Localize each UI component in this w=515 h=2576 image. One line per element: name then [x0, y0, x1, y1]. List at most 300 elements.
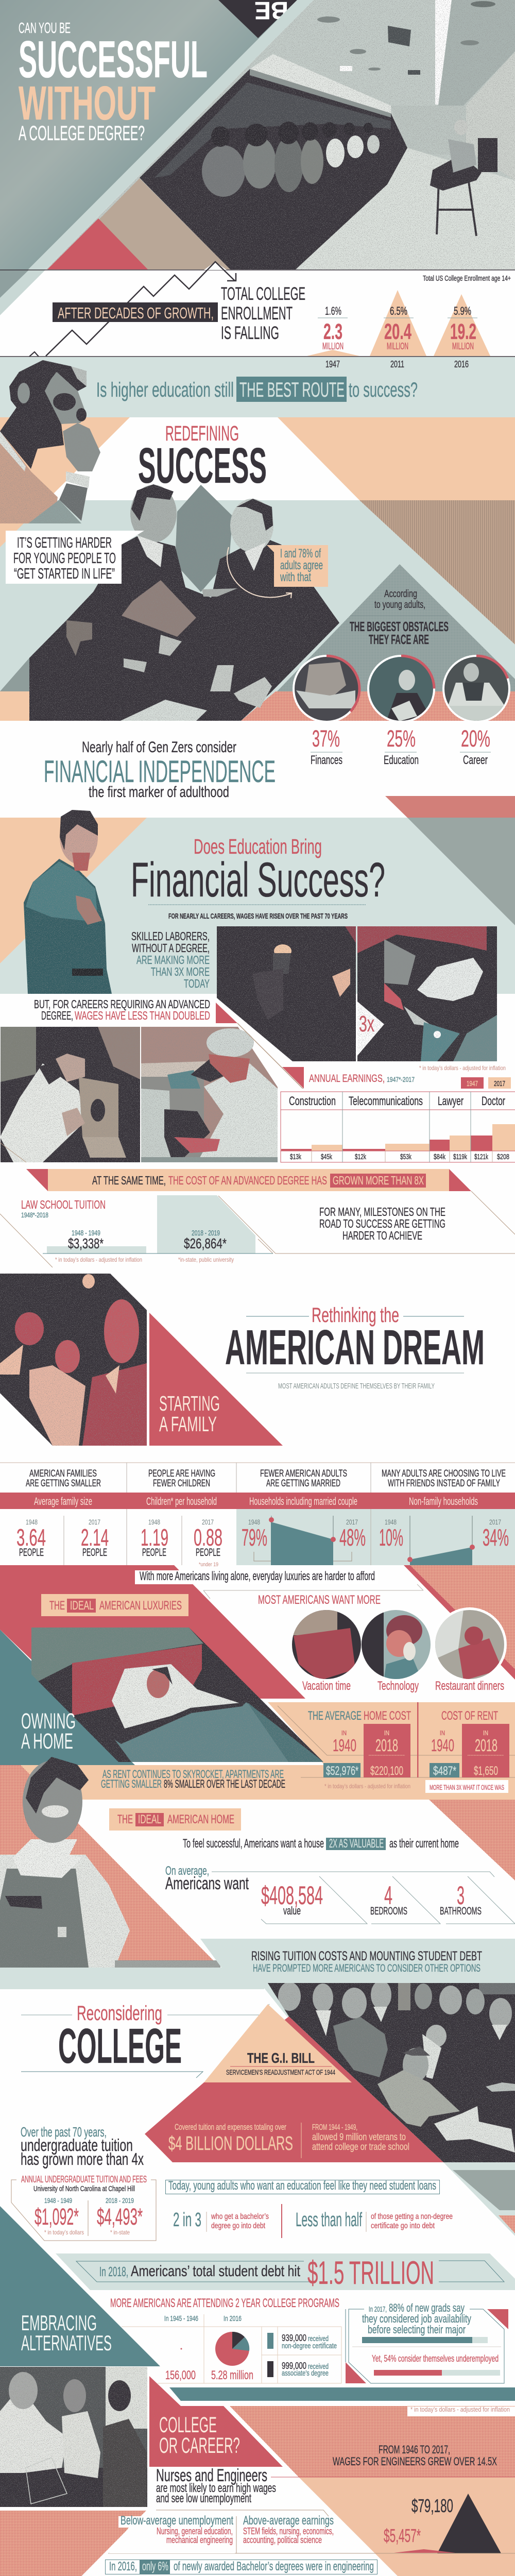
stats: debt comparison: 2 in 3 — [173, 2209, 201, 2231]
banner: cost of degree: GROWN MORE THAN 8X — [333, 1174, 424, 1187]
photo: two men — [29, 484, 339, 721]
stats: ideal home — [165, 1864, 515, 1924]
text: undergraduate tuition: undergraduate tuition — [21, 2136, 133, 2155]
tag: ideal luxuries: THE — [49, 1599, 65, 1613]
table: unemployment and earnings — [109, 2514, 334, 2553]
bar chart: law school tuition: 2018 - 2019 — [192, 1229, 220, 1238]
tag: ideal luxuries — [41, 1594, 188, 1616]
text: nurses and engineers: and see low unemployment — [156, 2492, 251, 2505]
stats: debt comparison — [173, 2204, 453, 2238]
chart: home cost and rent: $487* — [433, 1764, 456, 1778]
circle photo: vacation time: Vacation time — [302, 1679, 351, 1693]
text: skilled laborers: SKILLED LABORERS, — [131, 929, 210, 943]
tag: ideal home: IDEAL — [138, 1812, 161, 1826]
GI bill stats: FROM 1944 - 1949, — [312, 2123, 357, 2132]
bar values: $208 — [497, 1153, 509, 1161]
values: family size and children: 1948 — [26, 1518, 38, 1526]
stats: ideal home: BATHROOMS — [440, 1905, 482, 1917]
triangle chart: enrollment: MILLION — [387, 341, 408, 351]
box: new grads: before selecting their major — [368, 2323, 466, 2336]
light wedge — [260, 1983, 299, 2017]
banner: cost of degree — [26, 1169, 471, 1191]
legend: 1947 — [467, 1079, 478, 1088]
callout: harder to get started: FOR YOUNG PEOPLE TO — [13, 550, 116, 567]
heading: reconsidering college: COLLEGE — [58, 2019, 182, 2074]
text: twice as valuable: 2X AS VALUABLE — [329, 1837, 384, 1851]
box: UNC tuition: $4,493* — [97, 2204, 143, 2230]
values: family size and children: PEOPLE — [19, 1547, 44, 1558]
column headers: Lawyer — [438, 1094, 464, 1108]
heading: Does Education Bring — [194, 835, 322, 858]
text: advanced degree wages: DEGREE, — [41, 1009, 73, 1022]
area chart: non-family households: 2017 — [489, 1518, 501, 1526]
text: rent skyrocket: GETTING SMALLER — [101, 1777, 162, 1790]
text: skilled laborers: ARE MAKING MORE — [136, 953, 210, 967]
band labels: Households including married couple — [249, 1496, 357, 1507]
chart: engineer wage triangles: $5,457* — [384, 2525, 421, 2546]
heading: want more: MOST AMERICANS WANT MORE — [258, 1593, 381, 1607]
callout: 78 percent: with that — [280, 570, 311, 584]
tag: ideal home: AMERICAN HOME — [167, 1812, 234, 1826]
bar chart: law school tuition: * in today’s dollars - adjusted for inflation — [55, 1256, 142, 1263]
column headers — [289, 1094, 505, 1108]
callout: 78 percent — [267, 545, 328, 587]
red title shape — [149, 2376, 283, 2467]
photo: woman in bed — [31, 1628, 325, 1764]
table: unemployment and earnings: Nursing, general education, — [157, 2526, 233, 2536]
text: rent skyrocket: 8% SMALLER OVER THE LAST DECADE — [164, 1777, 285, 1790]
panel: starting a family — [149, 1313, 283, 1446]
triangle chart: enrollment: 5.9% — [454, 304, 471, 317]
callout: 78 percent: I and 78% of — [280, 547, 321, 561]
legend: 939,000 — [282, 2333, 306, 2343]
panel: best route band — [0, 357, 515, 417]
stats: ideal home: 4 — [384, 1881, 392, 1910]
banner: cost of degree: AT THE SAME TIME, — [92, 1174, 166, 1187]
question: Is higher education still — [96, 379, 234, 401]
text: skilled laborers: THAN 3X MORE — [151, 965, 210, 978]
chart: home cost and rent: THE AVERAGE — [308, 1709, 362, 1723]
text: according to young adults: THEY FACE ARE — [369, 632, 429, 647]
photo: welder in dark — [217, 926, 356, 1061]
photo: family — [0, 1274, 149, 1449]
chart: two-year programs: 156,000 — [165, 2368, 196, 2382]
panel: starting a family: A FAMILY — [159, 1412, 217, 1436]
band labels — [34, 1496, 478, 1507]
year labels: 1947 — [325, 359, 340, 369]
tag: ideal home — [109, 1808, 241, 1831]
values: family size and children: *under 19 — [199, 1562, 218, 1568]
values: family size and children: PEOPLE — [82, 1547, 107, 1558]
pie chart — [215, 2332, 249, 2366]
bar values — [290, 1153, 509, 1161]
background shapes — [0, 2406, 515, 2576]
tan triangle — [50, 178, 230, 269]
panel: starting a family: STARTING — [159, 1392, 220, 1415]
heading: american dream — [225, 1304, 485, 1391]
photo: young man with glasses — [24, 810, 112, 994]
box: UNC tuition: ANNUAL UNDERGRADUATE TUITION AND FEES — [21, 2174, 147, 2184]
circle: career — [442, 654, 510, 723]
GI bill stats: $4 BILLION DOLLARS — [168, 2133, 293, 2155]
panel: embracing alternatives — [0, 2206, 515, 2383]
photo: person in hairnet — [141, 1027, 278, 1162]
text: nurses and engineers: are most likely to earn high wages — [156, 2481, 276, 2495]
stats: obstacles: 25% — [387, 725, 416, 752]
chart: home cost and rent: 2018 — [475, 1736, 497, 1755]
box: new grads: they considered job availability — [362, 2312, 471, 2325]
callout: engineering degrees: In 2016, — [109, 2560, 137, 2573]
triangle chart: enrollment — [307, 290, 490, 356]
heading: reconsidering college: Reconsidering — [77, 2002, 162, 2025]
title: SUCCESSFUL — [19, 31, 208, 89]
column headings: FEWER CHILDREN — [153, 1478, 210, 1489]
text: engineer wages: FROM 1946 TO 2017, — [379, 2443, 450, 2456]
chart: engineer wage triangles: $79,180 — [411, 2495, 453, 2516]
bar chart: law school tuition: $26,864* — [184, 1235, 227, 1251]
photo: woman at microscope — [0, 1027, 140, 1162]
bar chart: law school tuition — [21, 1195, 273, 1263]
band labels: Children* per household — [146, 1496, 217, 1507]
heading: ENROLLMENT — [221, 303, 293, 324]
legend — [267, 2333, 337, 2378]
year labels: 2011 — [390, 359, 404, 369]
red accent triangle — [216, 1003, 237, 1023]
arrow: curved — [227, 547, 291, 598]
photo: family with frame — [0, 2367, 147, 2507]
bar chart: law school tuition: *in-state, public university — [178, 1256, 234, 1263]
background shapes — [0, 1565, 515, 1968]
area chart: non-family households: 1948 — [385, 1518, 397, 1526]
legend — [461, 1077, 511, 1089]
text: skilled laborers: WITHOUT A DEGREE, — [132, 941, 210, 955]
callout: engineering degrees: of newly awarded Bachelor’s degrees were in engineering — [174, 2560, 374, 2573]
column headers: Telecommunications — [349, 1094, 423, 1108]
zigzag arrow — [29, 262, 236, 357]
stats: ideal home: 3 — [457, 1881, 465, 1910]
legend: 999,000 — [282, 2361, 306, 2371]
circle photo: technology: Technology — [377, 1679, 419, 1693]
chart: home cost and rent: 2018 — [375, 1736, 398, 1755]
teal title triangle: EMBRACING — [21, 2311, 97, 2335]
heading box — [53, 302, 218, 322]
callout: harder to get started: IT’S GETTING HARDER — [17, 535, 112, 551]
values: family size and children — [16, 1518, 222, 1568]
triangle chart: enrollment: 1.6% — [325, 304, 341, 317]
stats: obstacles: Career — [463, 753, 488, 767]
heading: FOR NEARLY ALL CAREERS, WAGES HAVE RISEN OVER THE PAST 70 YEARS — [168, 912, 348, 921]
heading: redefining success — [138, 421, 267, 494]
column headings: FEWER AMERICAN ADULTS — [260, 1468, 347, 1479]
stats: ideal home: BEDROOMS — [370, 1905, 407, 1917]
tag: ideal luxuries: AMERICAN LUXURIES — [99, 1599, 182, 1613]
footnote — [407, 2405, 515, 2416]
triangle chart: enrollment: 19.2 — [450, 319, 476, 344]
chart: home cost and rent: $1,650 — [474, 1764, 498, 1778]
red GI bill panel — [145, 2016, 443, 2162]
stats: obstacles: Education — [384, 753, 419, 767]
circle: education — [367, 654, 435, 723]
legend: received — [308, 2362, 329, 2371]
chart: home cost and rent — [278, 1702, 515, 1793]
table: unemployment and earnings: STEM fields, nursing, economics, — [243, 2526, 334, 2536]
chart: two-year programs: In 2016 — [224, 2314, 242, 2323]
label: owning a home: OWNING — [21, 1709, 76, 1734]
stats: obstacles — [311, 725, 491, 767]
text: according to young adults — [350, 588, 449, 647]
column headings: PEOPLE ARE HAVING — [148, 1468, 215, 1479]
chart: home cost and rent: $52,976* — [326, 1764, 358, 1778]
heading — [221, 284, 305, 343]
GI bill stats: attend college or trade school — [312, 2142, 409, 2153]
dark corner triangle — [218, 0, 297, 38]
values: family size and children: 2.14 — [81, 1524, 109, 1551]
photo: switchboard operators — [41, 0, 515, 269]
column headers: Construction — [289, 1094, 336, 1108]
band: student debt — [56, 2253, 515, 2291]
cover textured background — [0, 0, 297, 298]
table: unemployment and earnings: Below-average unemployment — [121, 2514, 233, 2528]
chart: two-year programs: MORE AMERICANS ARE ATTENDING 2 YEAR COLLEGE PROGRAMS — [110, 2296, 339, 2310]
chart: home cost and rent: IN — [341, 1729, 347, 1737]
bar values: $45k — [321, 1153, 332, 1161]
stats: debt comparison: degree go into debt — [211, 2222, 265, 2230]
triangle chart: enrollment: MILLION — [452, 341, 474, 351]
text: skilled laborers — [131, 929, 210, 990]
row backgrounds and lines — [0, 1463, 515, 1565]
bar values: $13k — [290, 1153, 301, 1161]
chart: two-year programs — [110, 2296, 341, 2383]
bar values: $84k — [434, 1153, 445, 1161]
values: family size and children: 3.64 — [16, 1524, 46, 1551]
photo: GI Bill signing — [268, 1980, 515, 2163]
area chart: non-family households: 10% — [379, 1524, 403, 1551]
callout: living alone — [135, 1569, 378, 1584]
band labels: Average family size — [34, 1496, 92, 1507]
panel: rethinking the american dream — [0, 1274, 515, 1568]
callout: engineering degrees — [105, 2560, 377, 2574]
box: UNC tuition: * in-state — [110, 2229, 130, 2236]
area chart: married households: 1948 — [248, 1518, 260, 1526]
area chart: married households: 2017 — [346, 1518, 358, 1526]
heading: redefining success: REDEFINING — [165, 421, 239, 445]
chart: engineer wage triangles — [109, 2494, 515, 2553]
legend: non-degree certificate — [282, 2342, 337, 2350]
circle photo: technology — [360, 1609, 433, 1693]
stats: ideal home: On average, — [165, 1864, 209, 1878]
table: family statistics — [0, 1463, 515, 1568]
circle: finances — [293, 654, 360, 723]
text: skilled laborers: TODAY — [184, 977, 210, 990]
chart: home cost and rent: HOME COST — [364, 1709, 411, 1723]
title: A COLLEGE DEGREE? — [19, 122, 145, 145]
heading: american dream: Rethinking the — [312, 1304, 399, 1327]
table grid — [281, 1092, 515, 1162]
panel: redefining success — [0, 360, 515, 801]
box: new grads: 88% of new grads say — [389, 2301, 465, 2314]
text: undergraduate tuition — [21, 2124, 144, 2168]
triangle chart: enrollment: 6.5% — [390, 304, 407, 317]
chart: home cost and rent: * in today’s dollars - adjusted for inflation — [324, 1783, 410, 1790]
chart: home cost and rent: IN — [384, 1729, 389, 1737]
chart: home cost and rent: IN — [440, 1729, 445, 1737]
triangle chart: enrollment: MILLION — [322, 341, 344, 351]
panel: reconsidering college — [11, 1980, 515, 2241]
teal title triangle — [0, 2206, 160, 2366]
area chart: non-family households — [379, 1516, 509, 1565]
stats: obstacles: 20% — [461, 725, 490, 752]
callout: 78 percent: adults agree — [280, 558, 323, 572]
bar chart: law school tuition: LAW SCHOOL TUITION — [21, 1198, 106, 1211]
column headings — [26, 1468, 506, 1489]
GI bill title: THE G.I. BILL — [247, 2050, 315, 2066]
right corner shapes — [443, 2162, 515, 2236]
diagonal stripes — [237, 1023, 304, 1090]
text: advanced degree wages — [34, 997, 210, 1022]
stats: debt comparison: certificate go into debt — [371, 2222, 435, 2230]
legend: received — [308, 2334, 329, 2343]
area chart: married households: 79% — [242, 1524, 267, 1551]
column headings: ARE GETTING MARRIED — [266, 1478, 340, 1489]
box: UNC tuition: 2018 - 2019 — [106, 2196, 134, 2205]
stats: obstacles: 37% — [312, 725, 340, 752]
title — [19, 20, 208, 145]
photo: man thinking — [0, 360, 100, 523]
text: milestones — [319, 1205, 445, 1242]
chart: home cost and rent: $220,100 — [370, 1764, 403, 1778]
bar values: $121k — [474, 1153, 488, 1161]
bar values: $119k — [453, 1153, 467, 1161]
bar chart: annual earnings — [279, 1064, 515, 1164]
bar chart: law school tuition: $3,338* — [68, 1235, 104, 1251]
circle photo: restaurant dinners — [433, 1607, 507, 1693]
stats: debt comparison: of those getting a non-degree — [371, 2212, 453, 2221]
values: family size and children: 2017 — [89, 1518, 100, 1526]
text: undergraduate tuition: Over the past 70 years, — [21, 2124, 107, 2140]
text: rent skyrocket — [101, 1768, 285, 1790]
box: new grads: In 2017, — [369, 2305, 387, 2314]
table: unemployment and earnings: mechanical engineering — [166, 2535, 233, 2545]
text: twice as valuable: To feel successful, Americans want a house — [183, 1837, 324, 1851]
heading: want more — [203, 1584, 423, 1607]
text: according to young adults: According — [384, 588, 417, 600]
title: CAN YOU BE — [19, 20, 71, 37]
stats: ideal home: value — [283, 1904, 301, 1917]
triangle chart: enrollment: 20.4 — [384, 319, 411, 344]
text: rent skyrocket: AS RENT CONTINUES TO SKYROCKET, APARTMENTS ARE — [102, 1768, 284, 1781]
GI bill title — [204, 2004, 352, 2082]
values: family size and children: PEOPLE — [196, 1547, 220, 1558]
red triangle — [47, 218, 148, 269]
box: new grads — [346, 2301, 508, 2383]
stats: debt comparison: who get a bachelor’s — [211, 2212, 269, 2221]
stats: ideal home: $408,584 — [261, 1881, 323, 1910]
chart: home cost and rent: IN — [483, 1729, 488, 1737]
label: owning a home — [21, 1709, 76, 1754]
question: to success? — [349, 379, 418, 401]
band: rising tuition — [0, 1939, 515, 1989]
diagonal stripe — [0, 0, 314, 315]
red title shape: COLLEGE — [159, 2413, 217, 2437]
text: engineer wages — [271, 2443, 515, 2477]
bar chart: law school tuition: 1948*-2018 — [21, 1211, 48, 1219]
values: family size and children: 1.19 — [141, 1524, 168, 1551]
box: UNC tuition: * in today’s dollars — [44, 2229, 84, 2236]
panel: cover hero — [0, 0, 515, 269]
column headings: ARE GETTING SMALLER — [26, 1478, 101, 1489]
background shapes — [0, 796, 515, 994]
GI bill title: SERVICEMEN’S READJUSTMENT ACT OF 1944 — [226, 2068, 335, 2076]
banner: cost of degree: THE COST OF AN ADVANCED DEGREE HAS — [168, 1174, 327, 1187]
label: owning a home: A HOME — [21, 1729, 73, 1754]
text: financial independence: FINANCIAL INDEPENDENCE — [44, 754, 276, 789]
text: financial independence — [44, 739, 276, 801]
callout: engineering degrees: only 6% — [142, 2560, 168, 2573]
panel: luxuries and owning a home — [0, 1565, 515, 1989]
GI bill stats — [168, 2122, 409, 2158]
legend: 2017 — [494, 1079, 505, 1088]
heading box: AFTER DECADES OF GROWTH, — [58, 304, 214, 322]
question — [96, 377, 418, 402]
box: UNC tuition: 1948 - 1949 — [44, 2196, 72, 2205]
area chart: married households: 48% — [339, 1524, 366, 1551]
chart: two-year programs: 5.28 million — [211, 2368, 253, 2382]
text: milestones: ROAD TO SUCCESS ARE GETTING — [319, 1217, 445, 1230]
text: advanced degree wages: BUT, FOR CAREERS REQUIRING AN ADVANCED — [34, 997, 210, 1011]
bars — [281, 1124, 515, 1151]
bar values: $12k — [355, 1153, 366, 1161]
teal title triangle: ALTERNATIVES — [21, 2331, 112, 2355]
GI bill stats: allowed 9 million veterans to — [312, 2132, 406, 2143]
heading — [131, 835, 385, 921]
text: milestones: HARDER TO ACHIEVE — [342, 1229, 422, 1242]
values: family size and children: 1948 — [148, 1518, 160, 1526]
text: financial independence: the first marker of adulthood — [89, 784, 229, 801]
bar chart: annual earnings: 1947*-2017 — [387, 1075, 415, 1083]
table: unemployment and earnings: accounting, political science — [243, 2535, 322, 2545]
text: according to young adults: to young adults, — [374, 599, 425, 611]
year labels — [325, 359, 469, 369]
panel: college or career — [0, 2367, 515, 2576]
box: UNC tuition: $1,092* — [35, 2204, 79, 2230]
box: UNC tuition: University of North Carolina at Chapel Hill — [33, 2184, 135, 2193]
photo: welder with mask — [357, 926, 497, 1061]
stats: debt comparison: Less than half — [296, 2209, 362, 2231]
year labels: 2016 — [454, 359, 469, 369]
stats: ideal home: Americans want — [165, 1874, 249, 1893]
background shapes — [0, 417, 515, 721]
chart: home cost and rent: 1940 — [431, 1736, 454, 1755]
bar chart: annual earnings: ANNUAL EARNINGS, — [309, 1073, 385, 1084]
values: family size and children: 2017 — [202, 1518, 214, 1526]
teal bar — [169, 2387, 515, 2401]
heading: redefining success: SUCCESS — [138, 437, 267, 494]
heading: reconsidering college — [21, 2002, 269, 2078]
text: milestones: FOR MANY, MILESTONES ON THE — [319, 1205, 445, 1218]
circle photo: vacation time — [291, 1609, 363, 1693]
photo: welder with mask: 3x — [359, 1011, 374, 1037]
tag: ideal luxuries: IDEAL — [70, 1599, 94, 1613]
decorative rules — [0, 1143, 515, 1267]
text: undergraduate tuition: has grown more than 4x — [21, 2149, 144, 2168]
text: financial independence: Nearly half of Gen Zers consider — [82, 739, 236, 756]
heading: TOTAL COLLEGE — [221, 284, 305, 304]
white band — [0, 269, 515, 357]
table: unemployment and earnings: Above-average earnings — [243, 2514, 334, 2528]
bar values: $53k — [400, 1153, 411, 1161]
text: nurses and engineers — [156, 2466, 329, 2516]
callout: harder to get started: “GET STARTED IN LIFE” — [14, 566, 115, 582]
